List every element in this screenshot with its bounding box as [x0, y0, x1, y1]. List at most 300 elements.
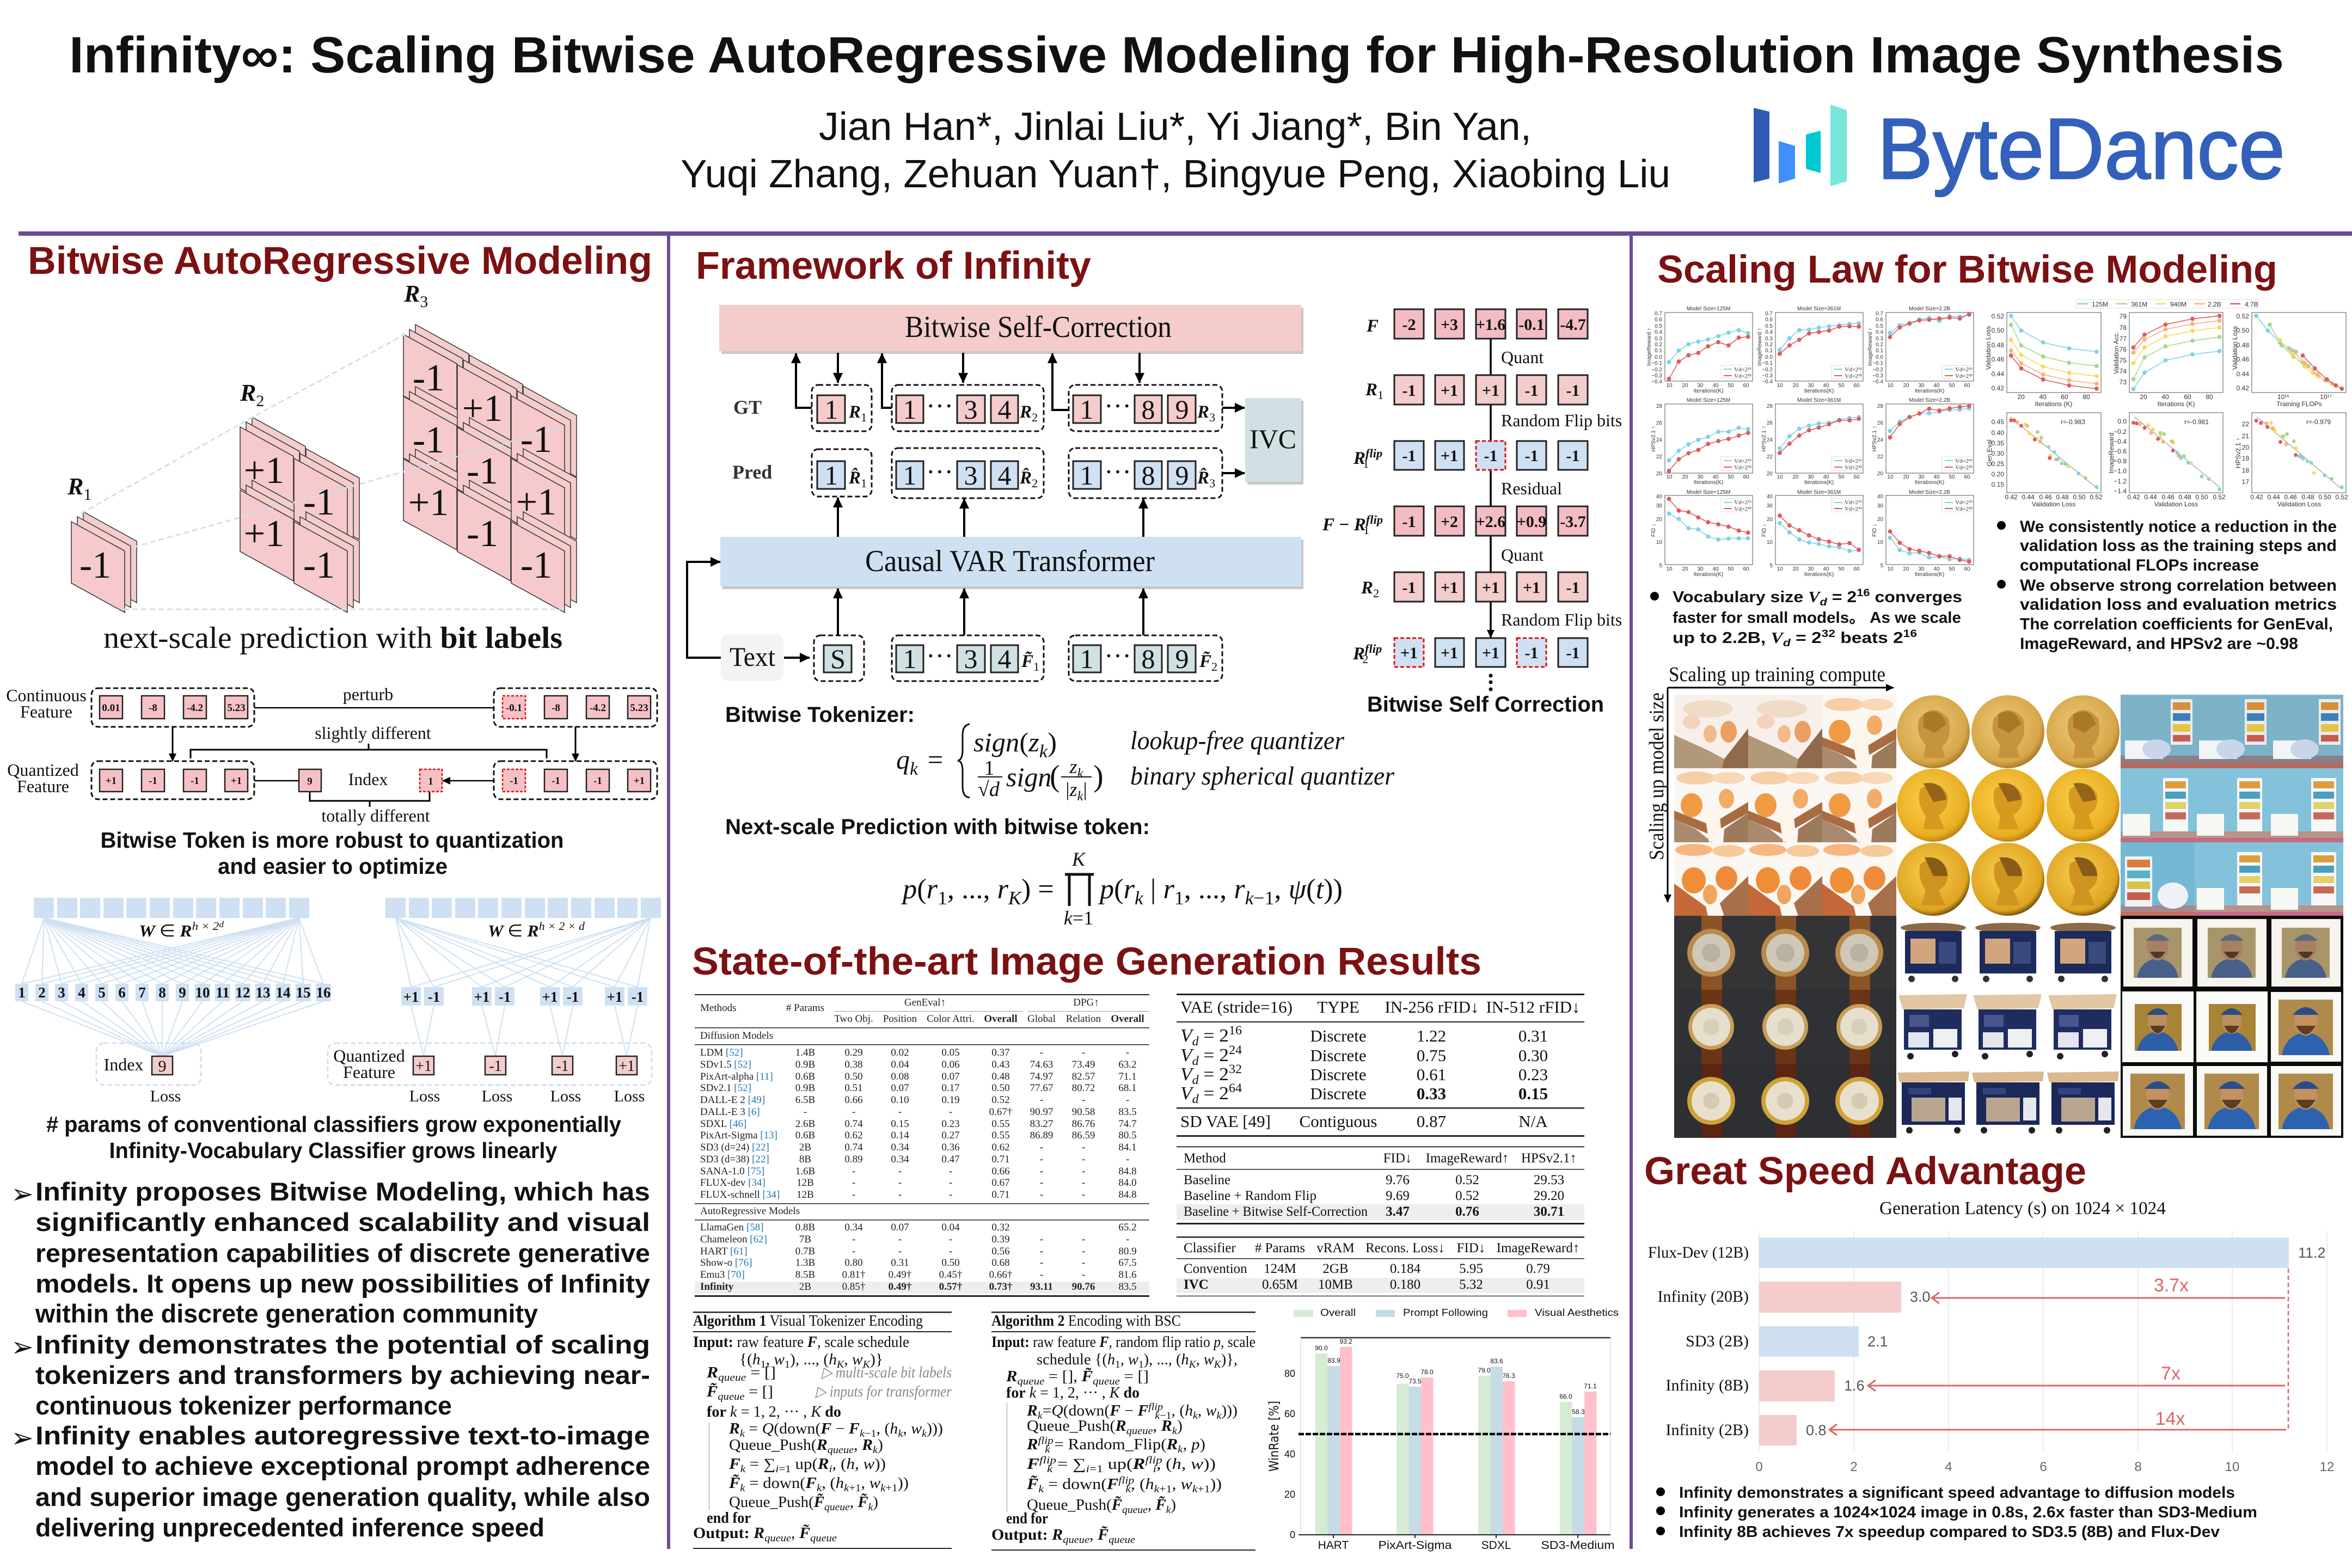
table: model comparison: 0.6B	[795, 1071, 815, 1082]
algorithm 2: F̃k = down( Fflipk, (hk+1, wk+1))	[1026, 1475, 1222, 1495]
chart: imagereward 125M: 0.5	[1655, 323, 1662, 329]
chart: fid 361M: 30	[1767, 503, 1773, 509]
table: model comparison: 84.8	[1118, 1166, 1137, 1177]
diagram: framework: R̂2	[1019, 467, 1038, 490]
diagram: bitwise self correction: +1.6	[1476, 316, 1505, 334]
chart: imagereward 361M: 0.4	[1765, 329, 1773, 335]
text: bitwise tokenizer: binary spherical quantizer	[1130, 762, 1394, 791]
table: model comparison: 82.57	[1072, 1071, 1095, 1082]
legend	[1294, 1307, 1619, 1318]
algorithm 1: Fk = ∑ i=1 up(Ri, (h, w))	[728, 1456, 886, 1475]
table: model comparison: 0.32	[991, 1222, 1010, 1233]
figure: infinite vocabulary classifier: +1	[618, 1058, 635, 1075]
scatter: imagereward vs validation loss: 0.50	[2195, 493, 2208, 501]
figure: quantization robustness: 9	[307, 776, 313, 787]
algorithm 2: Rflipk = Random_Flip( Rk, p)	[1026, 1435, 1205, 1455]
table: model comparison: 0.29	[844, 1047, 863, 1058]
diagram: framework: F̃1	[1021, 651, 1039, 673]
figure: next-scale tiles: R1	[67, 473, 91, 504]
diagram: framework: ···	[1104, 640, 1131, 671]
text: speed bullets	[1656, 1484, 2257, 1541]
text: bitwise token caption	[100, 828, 564, 879]
table: model comparison: 90.58	[1072, 1106, 1095, 1118]
text: classifier caption	[46, 1112, 621, 1163]
chart: imagereward 125M: Vd=2³²	[1734, 373, 1751, 379]
chart: fid 125M: 10	[1666, 566, 1673, 572]
chart: imagereward 361M	[1757, 306, 1863, 394]
scatter: hpsv2 vs validation loss: 17	[2242, 478, 2249, 486]
table: classifier comparison: ImageReward↑	[1497, 1241, 1579, 1255]
table: classifier comparison	[1177, 1236, 1584, 1297]
figure: next-scale tiles: +1	[244, 513, 284, 555]
text: bitwise tokenizer: qk	[896, 744, 918, 779]
chart: fid 125M: 50	[1728, 566, 1734, 572]
figure: quantization robustness: -0.1	[506, 702, 522, 714]
chart: fid 361M: FID ↓	[1761, 524, 1767, 537]
table: model comparison: 84.8	[1118, 1189, 1137, 1200]
diagram: bitwise self correction: Quant	[1501, 545, 1543, 565]
chart: fid 125M: 10	[1656, 540, 1662, 546]
chart: fid 2.2B: Model Size=2.2B	[1909, 489, 1950, 495]
chart: validation loss vs iterations: 0.42	[1992, 384, 2004, 392]
text: bullet points: Infinity proposes Bitwise Modeling, which has	[35, 1177, 650, 1206]
table: model comparison: Diffusion Models	[700, 1030, 773, 1042]
bar chart: win rate: 60	[1284, 1408, 1295, 1419]
chart: imagereward 125M: 0.1	[1655, 348, 1662, 354]
panel: framework of infinity	[687, 244, 1622, 1552]
chart: fid 125M: Vd=2¹⁶	[1734, 499, 1751, 506]
diagram: bitwise self correction: +1	[1441, 644, 1458, 662]
chart: fid 361M: 40	[1823, 566, 1829, 572]
text: bitwise tokenizer: √d	[978, 778, 1000, 801]
text: next-scale prediction formula: p(r1, ..., rK) =	[901, 874, 1054, 909]
text: bullet points: representation capabilities of discrete generative	[35, 1239, 650, 1267]
table: model comparison: -	[1082, 1094, 1085, 1106]
chart: imagereward 2.2B: 0.1	[1876, 348, 1883, 354]
algorithm 1: end for	[707, 1510, 751, 1527]
table: model comparison: 0.15	[891, 1118, 909, 1130]
chart: validation loss vs training flops	[2231, 313, 2346, 408]
chart: fid 361M: 50	[1838, 566, 1845, 572]
scatter: gen eval vs validation loss: 0.25	[1992, 460, 2004, 468]
algorithm 2: end for	[1006, 1510, 1048, 1527]
scatter: gen eval vs validation loss: 0.40	[1992, 429, 2004, 437]
algorithm 2: Rk=Q(down(F − Fflipk−1, (hk, wk)))	[1026, 1401, 1238, 1422]
algorithm 1: Queue_Push( Rqueue, Rk)	[729, 1437, 883, 1456]
chart: hpsv2 125M: 30	[1697, 474, 1704, 480]
algorithm 2	[991, 1312, 1255, 1551]
text: bitwise tokenizer: zk	[1069, 756, 1084, 781]
table: model comparison: 12B	[797, 1189, 814, 1200]
chart: imagereward 125M: −0.4	[1651, 379, 1662, 385]
table: VAE comparison: Discrete	[1310, 1084, 1367, 1103]
table: model comparison: -	[852, 1166, 855, 1177]
figure: next-scale tiles: -1	[520, 419, 552, 461]
figure: conventional classifier: 6	[118, 984, 126, 1001]
table: model comparison: AutoRegressive Models	[700, 1205, 800, 1217]
chart: generation latency: 6	[2039, 1460, 2047, 1474]
table: model comparison: 0.71	[991, 1189, 1010, 1200]
text: bitwise tokenizer: sign	[1006, 762, 1051, 792]
figure: next-scale tiles: +1	[516, 481, 556, 523]
legend: Overall	[1320, 1307, 1356, 1318]
figure: conventional classifier: 10	[195, 984, 210, 1001]
text: next-scale prediction formula: p(rk | r1, ..., rk−1, ψ(t))	[1098, 874, 1343, 909]
chart: imagereward 361M: −0.2	[1762, 367, 1773, 373]
table: model comparison: -	[1040, 1177, 1043, 1189]
chart: validation accuracy vs iterations: 78	[2120, 324, 2127, 332]
diagram: bitwise self correction	[1322, 309, 1622, 716]
scatter: hpsv2 vs validation loss: 0.50	[2318, 493, 2331, 501]
table: VAE comparison: 0.30	[1518, 1046, 1548, 1065]
diagram: bitwise self correction: +1	[1523, 579, 1540, 597]
bar chart: win rate: 75.0	[1396, 1372, 1409, 1380]
chart: generation latency: 3.0	[1910, 1289, 1931, 1305]
scatter: gen eval vs validation loss: r=-0.983	[2061, 418, 2085, 426]
chart: fid 2.2B: 40	[1933, 566, 1940, 572]
figure: conventional classifier: 2	[38, 984, 46, 1001]
chart: imagereward 361M: Vd=2³²	[1845, 373, 1862, 379]
table: classifier comparison: 10MB	[1318, 1277, 1353, 1292]
table: model comparison: Overall	[984, 1013, 1018, 1025]
table: model comparison: HART [61]	[700, 1246, 748, 1257]
scatter: gen eval vs validation loss: 0.52	[2090, 493, 2103, 501]
table: model comparison: 0.45†	[939, 1269, 962, 1281]
chart: imagereward 125M: 0.2	[1655, 342, 1662, 348]
table: model comparison: 0.34	[891, 1142, 909, 1153]
chart: imagereward 2.2B	[1867, 306, 1974, 394]
table: model comparison: 0.43	[991, 1059, 1010, 1070]
table: model comparison: 77.67	[1030, 1082, 1053, 1094]
table: bitwise self-correction comparison: ImageReward↑	[1426, 1151, 1509, 1166]
figure: conventional classifier: 9	[158, 1057, 167, 1075]
bar chart: win rate: HART	[1318, 1539, 1349, 1552]
table: model comparison: 63.2	[1118, 1059, 1137, 1070]
chart: fid 2.2B: 30	[1918, 566, 1925, 572]
text: bitwise tokenizer: |zk|	[1065, 779, 1087, 804]
table: bitwise self-correction comparison: Baseline	[1184, 1173, 1230, 1187]
figure: quantization robustness	[6, 684, 657, 825]
chart: hpsv2 125M: 20	[1656, 471, 1662, 477]
chart: hpsv2 125M: Vd=2¹⁶	[1734, 458, 1751, 464]
bar chart: win rate: WinRate [%]	[1266, 1401, 1282, 1472]
text: bullet points: continuous tokenizer performance	[35, 1391, 452, 1420]
text: bitwise tokenizer	[725, 703, 1394, 804]
chart: fid 361M: 5	[1769, 563, 1773, 569]
chart: imagereward 2.2B: Iterations(K)	[1915, 388, 1944, 394]
chart: imagereward 125M: 60	[1743, 383, 1749, 389]
text: next-scale prediction formula: K	[1071, 848, 1086, 870]
table: model comparison: 84.0	[1118, 1177, 1137, 1189]
table: classifier comparison: Classifier	[1184, 1241, 1236, 1255]
scatter: imagereward vs validation loss: 0.48	[2178, 493, 2191, 501]
diagram: framework: F̃2	[1199, 651, 1217, 673]
diagram: bitwise self correction: -2	[1402, 316, 1416, 334]
chart: imagereward 2.2B: −0.4	[1872, 379, 1883, 385]
chart: validation accuracy vs iterations: 40	[2161, 393, 2169, 401]
chart: fid 361M: Vd=2³²	[1845, 506, 1862, 512]
chart: fid 125M: 5	[1659, 563, 1662, 569]
chart: imagereward 361M: 0.3	[1765, 336, 1773, 342]
scatter: gen eval vs validation loss: 0.42	[2005, 493, 2018, 501]
table: model comparison: -	[1040, 1047, 1043, 1058]
diagram: bitwise self correction: Residual	[1501, 479, 1562, 498]
algorithm 2: Algorithm 2 Encoding with BSC	[991, 1313, 1181, 1330]
chart: imagereward 2.2B: −0.3	[1872, 373, 1883, 379]
chart: hpsv2 2.2B: 30	[1918, 474, 1925, 480]
figure: infinite vocabulary classifier: Loss	[409, 1087, 440, 1105]
table: model comparison: 7B	[799, 1234, 811, 1245]
text: bitwise tokenizer: (	[1050, 759, 1060, 793]
chart: hpsv2 125M: 50	[1728, 474, 1734, 480]
table: model comparison: Relation	[1066, 1013, 1101, 1025]
chart: validation loss vs iterations: Validation Loss	[1984, 326, 1992, 370]
table: model comparison: 12B	[797, 1177, 814, 1189]
chart: hpsv2 361M	[1761, 397, 1863, 486]
table: model comparison: -	[852, 1189, 855, 1200]
table: model comparison: -	[852, 1234, 855, 1245]
diagram: framework: 8	[1141, 460, 1155, 491]
figure: conventional classifier: 12	[235, 984, 250, 1001]
table: VAE comparison: SD VAE [49]	[1180, 1112, 1271, 1131]
table: model comparison: Global	[1027, 1013, 1056, 1025]
diagram: bitwise self correction: Random Flip bits	[1501, 610, 1622, 629]
table: model comparison: 1.4B	[795, 1047, 815, 1058]
diagram: bitwise self correction: -1	[1402, 382, 1416, 400]
table: VAE comparison: 1.22	[1417, 1026, 1446, 1045]
text: validation loss bullets: The correlation coefficients for GenEval,	[2020, 615, 2333, 633]
diagram: bitwise self correction: R1	[1365, 380, 1383, 402]
chart: fid 2.2B: Iterations(K)	[1915, 572, 1944, 578]
table: model comparison: 0.04	[941, 1222, 960, 1233]
diagram: framework: 1	[903, 394, 917, 425]
chart: fid 125M: Model Size=125M	[1687, 489, 1730, 495]
text: bitwise tokenizer: sign(zk)	[973, 727, 1057, 762]
chart: imagereward 361M: −0.4	[1762, 379, 1773, 385]
table: classifier comparison: 0.91	[1526, 1277, 1550, 1292]
figure: infinite vocabulary classifier: Loss	[614, 1087, 645, 1105]
chart: imagereward 361M: −0.3	[1762, 373, 1773, 379]
text: bullet points: delivering unprecedented inference speed	[35, 1513, 544, 1542]
diagram: bitwise self correction: -1	[1484, 447, 1497, 465]
table: model comparison: 0.68	[991, 1257, 1010, 1269]
chart: validation loss vs iterations: 0.50	[1992, 327, 2004, 334]
diagram: bitwise self correction: -1	[1566, 382, 1580, 400]
chart: fid 2.2B: 20	[1877, 517, 1883, 523]
figure: next-scale tiles: -1	[413, 357, 444, 399]
table: VAE comparison: Contiguous	[1300, 1112, 1377, 1131]
table: model comparison: 86.76	[1072, 1118, 1095, 1130]
chart: generation latency: 8	[2134, 1460, 2142, 1474]
chart: imagereward 2.2B: 50	[1949, 383, 1955, 389]
chart: hpsv2 361M: 40	[1823, 474, 1829, 480]
chart: validation loss vs training flops: 0.44	[2237, 370, 2249, 378]
table: model comparison: -	[1126, 1234, 1129, 1245]
diagram: bitwise self correction: F	[1366, 316, 1379, 336]
table: model comparison: 83.5	[1118, 1106, 1137, 1118]
table: model comparison: -	[1082, 1177, 1085, 1189]
text: validation loss bullets: computational FLOPs increase	[2020, 556, 2259, 574]
heading: Framework of Infinity	[696, 244, 1092, 287]
chart: fid 361M: 10	[1777, 566, 1783, 572]
chart: imagereward 361M: 0.6	[1765, 317, 1773, 323]
chart: imagereward 361M: 50	[1838, 383, 1845, 389]
figure: infinite vocabulary classifier: -1	[632, 989, 644, 1005]
text: bullet points: and superior image generation quality, while also	[35, 1483, 650, 1511]
table: model comparison: 67.5	[1118, 1257, 1137, 1269]
chart: validation accuracy vs iterations: 80	[2206, 393, 2213, 401]
chart: validation loss vs training flops: 0.50	[2237, 327, 2249, 334]
chart: generation latency: 3.7x	[2154, 1275, 2189, 1296]
chart: validation loss vs iterations: 0.48	[1992, 341, 2004, 349]
bar chart: win rate: 83.9	[1327, 1357, 1340, 1364]
scatter: imagereward vs validation loss: 0.52	[2213, 493, 2226, 501]
table: model comparison: -	[949, 1166, 952, 1177]
table: model comparison: 0.19	[941, 1094, 960, 1106]
algorithm 1: Algorithm 1 Visual Tokenizer Encoding	[693, 1313, 923, 1330]
diagram: bitwise self correction: -1	[1566, 579, 1580, 597]
chart: imagereward 361M: 0.0	[1765, 354, 1773, 360]
diagram: framework: 1	[824, 394, 838, 425]
table: model comparison: 0.08	[891, 1071, 909, 1082]
figure: infinite vocabulary classifier: Loss	[482, 1087, 512, 1105]
chart: hpsv2 361M: 10	[1777, 474, 1783, 480]
table: classifier comparison: # Params	[1255, 1241, 1305, 1255]
table: model comparison: 0.62	[844, 1130, 863, 1141]
table: bitwise self-correction comparison: Method	[1184, 1151, 1226, 1166]
figure: infinite vocabulary classifier: +1	[474, 989, 489, 1005]
text: bullet points: ➢	[11, 1178, 34, 1210]
scatter: gen eval vs validation loss: 0.48	[2056, 493, 2069, 501]
table: classifier comparison: 2GB	[1322, 1261, 1349, 1276]
table: model comparison: 0.07	[891, 1082, 909, 1094]
figure: quantization robustness: -4.2	[590, 702, 606, 714]
chart: hpsv2 2.2B: Model Size=2.2B	[1909, 397, 1950, 403]
chart: imagereward 125M: 30	[1697, 383, 1704, 389]
figure: infinite vocabulary classifier: -1	[428, 989, 440, 1005]
heading: state of the art results: State-of-the-art Image Generation Results	[692, 940, 1481, 983]
text: bullet points: Infinity demonstrates the potential of scaling	[35, 1330, 650, 1359]
table: bitwise self-correction comparison: 3.47	[1386, 1204, 1410, 1219]
table: model comparison: 2B	[799, 1142, 811, 1153]
chart: imagereward 361M: 60	[1853, 383, 1860, 389]
algorithm 2: Output: Rqueue, F̃queue	[991, 1527, 1136, 1546]
chart: fid 361M: 40	[1767, 494, 1773, 500]
table: model comparison: -	[949, 1177, 952, 1189]
scatter: imagereward vs validation loss: −0.4	[2114, 438, 2127, 445]
table: classifier comparison: 0.180	[1390, 1277, 1420, 1292]
chart: hpsv2 125M: 24	[1656, 437, 1662, 443]
diagram: framework: 3	[964, 394, 978, 425]
table: VAE comparison: IN-512 rFID↓	[1486, 997, 1581, 1016]
table: model comparison: 0.50	[991, 1082, 1010, 1094]
table: model comparison: 0.50	[941, 1257, 960, 1269]
table: VAE comparison	[1177, 994, 1584, 1137]
table: model comparison: 0.71	[991, 1154, 1010, 1165]
chart: generation latency: 10	[2225, 1460, 2239, 1474]
algorithm 1	[693, 1312, 952, 1549]
figure: conventional classifier: 8	[158, 984, 166, 1001]
algorithm 1: Queue_Push(F̃queue, F̃k)	[729, 1494, 878, 1513]
table: VAE comparison: Vd = 264	[1180, 1081, 1242, 1106]
text: vocabulary bullet	[1650, 587, 1962, 649]
chart: imagereward 2.2B: 0.7	[1876, 311, 1883, 317]
chart: generation latency: SD3 (2B)	[1686, 1332, 1749, 1350]
chart: validation loss vs iterations: 0.52	[1992, 313, 2004, 320]
chart: imagereward 125M: Model Size=125M	[1687, 306, 1730, 312]
diagram: framework: 4	[997, 460, 1012, 491]
figure: next-scale tiles: R3	[403, 280, 428, 311]
diagram: bitwise self correction: -1	[1402, 579, 1416, 597]
figure: conventional classifier: 3	[58, 984, 65, 1001]
bar chart: win rate: 0	[1290, 1529, 1295, 1540]
chart: validation loss vs iterations	[1984, 313, 2101, 408]
table: VAE comparison: VAE (stride=16)	[1180, 997, 1293, 1016]
scatter: imagereward vs validation loss: 0.44	[2144, 493, 2157, 501]
table: model comparison: 1.3B	[795, 1257, 815, 1269]
scatter: hpsv2 vs validation loss: HPSv2.1 ↑	[2234, 438, 2242, 468]
text: validation loss bullets: validation loss as the training steps and	[2020, 537, 2337, 555]
table: bitwise self-correction comparison: 0.52	[1455, 1173, 1479, 1187]
figure: infinite vocabulary classifier: +1	[403, 989, 419, 1005]
chart: hpsv2 125M: 40	[1712, 474, 1719, 480]
chart: generation latency: 2.1	[1867, 1333, 1888, 1350]
table: model comparison: 0.80	[844, 1257, 863, 1269]
table: model comparison: -	[1040, 1269, 1043, 1281]
figure: quantization robustness: Index	[348, 769, 388, 789]
chart: imagereward 125M	[1646, 306, 1753, 394]
diagram: bitwise self correction: -0.1	[1518, 316, 1545, 334]
chart: fid 361M: 30	[1808, 566, 1814, 572]
table: model comparison: -	[898, 1166, 902, 1177]
table: model comparison: 68.1	[1118, 1082, 1137, 1094]
diagram: framework: 8	[1141, 644, 1155, 674]
scatter: imagereward vs validation loss: 0.0	[2117, 418, 2127, 425]
scatter: gen eval vs validation loss: 0.35	[1992, 439, 2004, 447]
scatter: gen eval vs validation loss: Validation Loss	[2032, 500, 2075, 508]
samples: tablecloth	[1674, 695, 1896, 916]
figure: quantization robustness: Continuous	[6, 685, 87, 705]
chart: fid 361M: 20	[1792, 566, 1799, 572]
bar chart: win rate: 20	[1284, 1489, 1295, 1500]
scatter: gen eval vs validation loss: 0.45	[1992, 418, 2004, 426]
table: model comparison: DALL-E 3 [6]	[700, 1106, 760, 1118]
algorithm 2: for k = 1, 2, ··· , K do	[1006, 1385, 1140, 1401]
bar chart: win rate: 73.5	[1408, 1377, 1422, 1385]
axis label: scaling up model size: Scaling up model size	[1645, 693, 1668, 860]
chart: validation accuracy vs iterations	[2112, 313, 2223, 408]
table: model comparison: 0.6B	[795, 1130, 815, 1141]
chart: validation accuracy vs iterations: 20	[2140, 393, 2147, 401]
chart: hpsv2 361M: 60	[1853, 474, 1860, 480]
bar chart: win rate: 76.3	[1502, 1372, 1515, 1380]
table: classifier comparison: 5.95	[1459, 1261, 1483, 1276]
chart: imagereward 125M: Iterations(K)	[1694, 388, 1723, 394]
chart: hpsv2 125M: Model Size=125M	[1687, 397, 1730, 403]
figure: next-scale tiles	[67, 280, 577, 612]
scatter: hpsv2 vs validation loss: 0.42	[2250, 493, 2263, 501]
table: model comparison: 0.47	[941, 1154, 960, 1165]
table: model comparison: SANA-1.0 [75]	[700, 1166, 764, 1177]
chart: fid 2.2B: 10	[1877, 540, 1883, 546]
table: model comparison: 0.7B	[795, 1246, 815, 1257]
text: bullet points: ➢	[11, 1331, 34, 1363]
figure: infinite vocabulary classifier: -1	[499, 989, 511, 1005]
table: model comparison: 0.06	[941, 1059, 960, 1070]
scatter: imagereward vs validation loss: −0.2	[2114, 428, 2127, 436]
table: classifier comparison: 5.32	[1459, 1277, 1483, 1292]
legend: Prompt Following	[1403, 1307, 1488, 1318]
